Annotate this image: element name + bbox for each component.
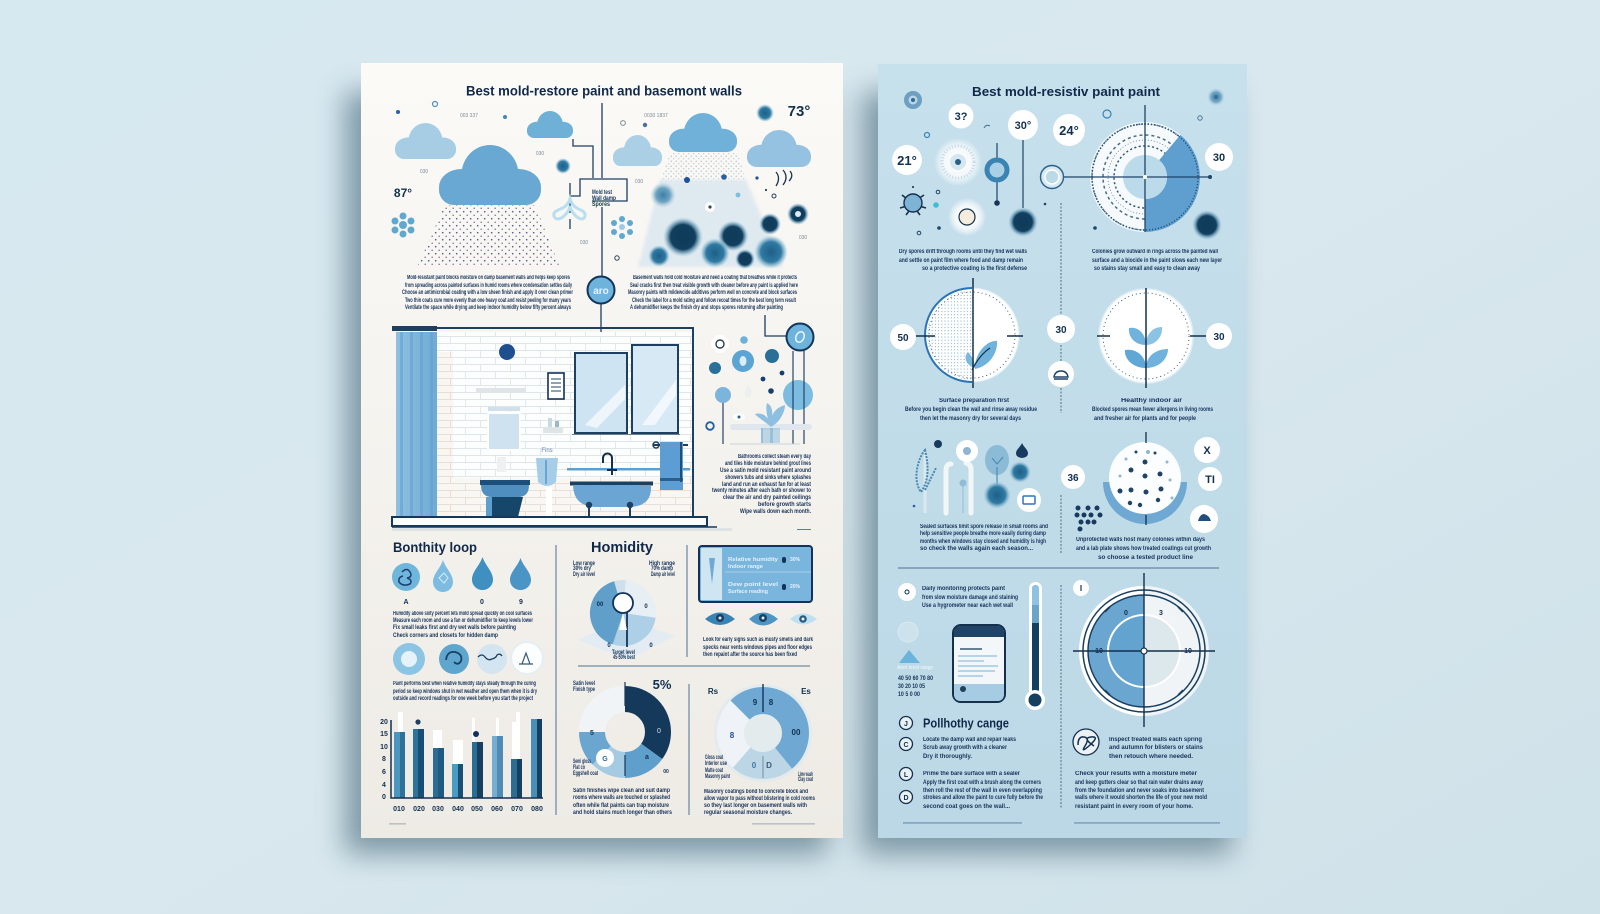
marker labels: J: [904, 721, 908, 728]
icon: badge top right of scene: [786, 324, 814, 350]
text block: drops: Humidity above sixty percent lets mold spread quickly on cool surfaces: [393, 611, 532, 617]
badge: centre icon: [1048, 361, 1074, 387]
clouds: [395, 111, 811, 205]
icon: central badge: [588, 276, 614, 304]
panel: humidity card: Indoor range: [728, 564, 763, 570]
text block: plants: so check the walls again each season...: [920, 546, 1033, 552]
text block: plants: [920, 524, 1048, 552]
text block: monitor: Daily monitoring protects paint: [922, 586, 1005, 592]
text block: badges: period so keep windows shut in wet weather and open them when it is dry: [393, 689, 537, 695]
text block: steps one: [923, 737, 1017, 760]
badge: screen icon: [1017, 488, 1041, 512]
stat: 73 percent: 73°: [788, 103, 810, 120]
footer: right: [903, 822, 1220, 824]
text block: drops: Measure each room and use a fan or dehumidifier to keep levels lower: [393, 618, 533, 624]
badges: top values: [892, 104, 1233, 175]
panel: humidity card: 30%: [790, 557, 801, 563]
fuzzy spore: [934, 138, 982, 186]
labels: drops: [403, 599, 523, 606]
small shelf: [543, 418, 563, 433]
badge: 30 centre: 30: [1055, 325, 1067, 336]
text block: right intro: Check the label for a mold rating and follow recoat times for the best long term result: [632, 298, 796, 304]
text block: top left: so a protective coating is the first defense: [922, 266, 1028, 272]
chart: donut left: Satin level: [573, 681, 595, 687]
text block: plants: Sealed surfaces limit spore release in small rooms and: [920, 524, 1048, 530]
chart: humidity pie: 0: [649, 643, 653, 649]
text block: eyes: specks near vents windows pipes and floor edges: [703, 645, 812, 651]
text block: donut right: allow vapor to pass without blistering in cold rooms: [704, 796, 815, 802]
wall picture: [548, 373, 564, 399]
text block: scene caption: clear the air and dry painted ceilings: [723, 495, 812, 501]
badge: 50: 50: [897, 333, 909, 344]
text block: dial left: Before you begin clean the wall and rinse away residue: [905, 407, 1038, 413]
marker labels: C: [903, 742, 909, 749]
text block: steps one: Scrub away growth with a cleaner: [923, 745, 1008, 751]
towel: [653, 442, 688, 490]
panel shadows: [345, 92, 1232, 854]
icons and legend: alerts: 30 20 10 05: [898, 684, 926, 690]
icons and legend: alerts: [897, 622, 934, 698]
chart: humidity pie: Dry air level: [573, 572, 595, 578]
chart: donut right: Rs: [708, 687, 719, 696]
badges: top values: 30°: [1015, 120, 1031, 132]
chart: donut right: Gloss coat: [705, 755, 723, 761]
dark mold blob right: [1192, 210, 1222, 240]
panel: humidity card: 20%: [790, 584, 801, 590]
tiny labels: 030: [580, 240, 588, 246]
heading: right lower: Pollhothy cange: [923, 716, 1009, 730]
text block: dial right: and fresher air for plants and for people: [1094, 416, 1197, 422]
text block: drops: Fix small leaks first and dry wet walls before painting: [393, 625, 516, 631]
chart: donut left: [573, 677, 672, 779]
chart: target dial: [1062, 102, 1220, 252]
text block: left intro: from spreading across painted surfaces in humid rooms where condensation settles daily: [405, 283, 572, 289]
chart: donut left: Flat co: [573, 765, 585, 771]
tiny labels: 030: [635, 179, 643, 185]
chart: dial right with plant: [1097, 288, 1207, 388]
rain dot field: [418, 205, 559, 265]
heading: humidity: Homidity: [591, 539, 654, 556]
text block: right steps two: [1074, 771, 1207, 810]
chart: donut left: 00: [663, 769, 669, 775]
text block: left intro: [402, 275, 573, 311]
chart: donut right: 00: [792, 728, 801, 737]
text block: donut right: regular seasonal moisture changes.: [704, 810, 792, 816]
text block: donut left: often while flat paints can trap moisture: [573, 803, 670, 809]
tiny labels: 0030 1837: [644, 113, 668, 119]
marker labels: [903, 721, 909, 802]
ring spore: [987, 160, 1007, 180]
text block: dial left: then let the masonry dry for several days: [920, 416, 1022, 422]
text block: culture plate: Unprotected walls host many colonies within days: [1076, 537, 1206, 543]
chart: humidity pie: Low range: [573, 561, 595, 567]
pale reference bars: [398, 712, 520, 764]
chart: donut left: 5%: [653, 677, 672, 692]
chart: donut right: 0: [752, 761, 757, 770]
small dots: [917, 110, 1202, 235]
counter: [567, 468, 690, 470]
text block: dial right: Healthy indoor air: [1121, 398, 1183, 404]
title: right poster: Best mold-resistiv paint paint: [972, 85, 1161, 99]
badge: 30 right: [1206, 323, 1232, 349]
axis labels: 15: [380, 731, 388, 738]
text block: top right: [1092, 249, 1223, 272]
chart: large gauge: 10: [1095, 648, 1103, 655]
text block: donut left: [573, 788, 673, 816]
cabinet and mirror: [476, 388, 525, 472]
bar chart: [380, 712, 543, 813]
text block: left intro: Ventilate the space while drying and keep indoor humidity below fifty percent always: [405, 305, 571, 311]
dots grid: [1074, 506, 1102, 532]
icons and legend: alerts: 40 50 60 70 80: [898, 676, 934, 682]
windows: [572, 345, 680, 434]
text block: donut right: Masonry coatings bond to concrete block and: [704, 789, 808, 795]
cluster: spores and plant: [706, 335, 813, 444]
text block: donut left: rooms where walls are touched or splashed: [573, 795, 670, 801]
text block: left intro: Choose an antimicrobial coating with a low sheen finish and apply it over clean primer: [402, 290, 573, 296]
chart: donut right: Matte coat: [705, 768, 723, 774]
connector lines top: [997, 140, 1023, 208]
title: left poster: Best mold-restore paint and basemont walls: [466, 84, 742, 98]
panel: humidity card: Relative humidity: [728, 557, 778, 563]
illustration: bathroom scene: [392, 326, 732, 531]
text block: top left: [899, 249, 1028, 272]
text block: right steps two: Check your results with a moisture meter: [1075, 771, 1198, 777]
badge: I: I: [1080, 584, 1082, 593]
chart: donut left: 0: [657, 728, 661, 735]
dark mold blob: [1008, 207, 1038, 237]
text block: steps two: Prime the bare surface with a sealer: [923, 771, 1021, 777]
dashed divider: [1060, 203, 1062, 553]
text block: dial left: Surface preparation first: [939, 398, 1009, 404]
axis labels: 4: [382, 782, 386, 789]
vase: [536, 448, 558, 517]
text block: steps two: second coat goes on the wall...: [923, 804, 1010, 810]
badges: culture plate: TI: [1205, 474, 1215, 486]
text block: culture plate: [1076, 537, 1211, 561]
text block: right steps two: walls where it would shorten the life of your new mold: [1074, 795, 1207, 801]
bars: [394, 719, 542, 798]
text block: right intro: A dehumidifier keeps the finish dry and stops spores returning after painting: [630, 305, 783, 311]
axis labels: 6: [382, 769, 386, 776]
text block: dial right: [1092, 398, 1214, 422]
text block: right steps one: then retouch where needed.: [1109, 754, 1193, 760]
text block: steps two: [923, 771, 1044, 810]
chart: donut right: 8: [730, 731, 735, 740]
text block: donut right: so they last longer on basement walls with: [704, 803, 807, 809]
labels: drops: A: [403, 599, 409, 606]
panel: humidity card: [699, 546, 812, 602]
numbered markers: [900, 716, 912, 804]
text block: top right: Colonies grow outward in rings across the painted wall: [1092, 249, 1218, 255]
text block: right intro: Basement walls hold cold moisture and need a coating that breathes while it protects: [633, 275, 797, 281]
text block: badges: [393, 681, 537, 702]
text block: drops: Check corners and closets for hidden damp: [393, 633, 498, 639]
floor slab: [392, 517, 732, 531]
panel: left poster: [361, 63, 843, 838]
axis labels: 0: [382, 794, 386, 801]
marker labels: L: [904, 772, 909, 779]
axis labels: 10: [380, 744, 388, 751]
chart: donut right: Interior use: [705, 761, 727, 767]
icon: central badge: aro: [593, 286, 609, 297]
text block: right steps one: and autumn for blisters or stains: [1109, 745, 1204, 751]
text block: dial right: Blocked spores mean fewer allergens in living rooms: [1092, 407, 1214, 413]
thermometer: [1025, 582, 1045, 710]
text block: right steps two: and keep gutters clear so that rain water drains away: [1075, 780, 1204, 786]
icons: circular badges: [393, 642, 543, 675]
badge: 36: 36: [1067, 473, 1079, 484]
badge: 50: [890, 324, 916, 350]
spore cloud field with mold blobs: [638, 153, 788, 269]
tiny labels: 030: [536, 151, 544, 157]
chart: donut left: 5: [590, 730, 594, 737]
frame: [393, 328, 693, 517]
text block: right steps two: resistant paint in every room of your home.: [1075, 804, 1193, 810]
chart: donut left: Finish type: [573, 687, 595, 693]
icons and legend: alerts: 10 5 0 00: [898, 692, 921, 698]
text block: right steps one: Inspect treated walls each spring: [1109, 737, 1202, 743]
mold and spore accents: [396, 102, 809, 260]
text block: right intro: Masonry paints with mildewcide additives perform well on concrete and block surfaces: [628, 290, 797, 296]
text block: scene caption: before growth starts: [758, 502, 812, 508]
chart: humidity pie: 30% dry: [573, 566, 592, 572]
toilet: [480, 480, 530, 517]
axes: [391, 720, 543, 798]
axis labels: 020: [413, 806, 425, 813]
text block: scene caption: and tiles hide moisture behind grout lines: [725, 461, 811, 467]
badges: culture plate: [1190, 437, 1222, 533]
chart: donut left: a: [645, 754, 649, 761]
chart: large gauge: 10: [1184, 648, 1192, 655]
wall tiles: [437, 332, 692, 517]
chart: donut right: 9: [753, 698, 758, 707]
axis labels: 8: [382, 756, 386, 763]
chart: donut right: Clay coat: [798, 777, 813, 783]
chart: donut right: D: [766, 761, 772, 770]
text block: top right: so stains stay small and easy to clean away: [1094, 266, 1201, 272]
dashed divider lower: [1060, 585, 1062, 808]
text block: scene caption: showers tubs and sinks where splashes: [725, 475, 811, 481]
text block: steps two: Apply the first coat with a brush along the corners: [923, 780, 1042, 786]
marker labels: D: [903, 795, 909, 802]
footer: left: [389, 822, 815, 825]
glowing spore: [948, 198, 986, 236]
axis labels: 060: [491, 806, 503, 813]
text block: badges: outside and record readings for one week before you start the project: [393, 696, 533, 702]
axis labels: 20: [380, 719, 388, 726]
text block: top left: and settle on paint film where food and damp remain: [899, 258, 1023, 264]
stat: 87 percent: 87°: [394, 186, 412, 200]
vent: [499, 344, 515, 360]
badge: 30 centre: [1047, 315, 1075, 343]
text block: scene caption: twenty minutes after each bath or shower to: [712, 488, 811, 494]
text block: right steps two: from the foundation and never soaks into basement: [1075, 788, 1204, 794]
connector label: Spores: [592, 202, 611, 208]
chart: humidity pie: 70% damp: [651, 566, 673, 572]
chart: donut right: 8: [769, 698, 774, 707]
chart: dial left with leaf: [915, 278, 1023, 388]
text block: steps one: Locate the damp wall and repair leaks: [923, 737, 1017, 743]
text block: left intro: Mold-resistant paint blocks moisture on damp basement walls and helps keep spores: [407, 275, 570, 281]
chart: donut right: Masonry paint: [705, 774, 730, 780]
vase: Fins: [541, 448, 553, 454]
text block: monitor: [922, 586, 1018, 609]
chart: donut right: [705, 684, 813, 783]
illustration: plants and spores: [913, 440, 1031, 513]
tiny labels: 030: [799, 235, 807, 241]
knob: [1040, 166, 1064, 188]
chart: humidity pie: [573, 561, 676, 661]
badges: top values: 3?: [955, 111, 968, 123]
text block: scene caption: [712, 454, 812, 515]
text block: plants: months when windows stay closed and humidity is high: [920, 539, 1046, 545]
text block: culture plate: so choose a tested product line: [1098, 555, 1194, 561]
tiny labels: 030: [420, 169, 428, 175]
chart: humidity pie: Damp air level: [651, 572, 675, 578]
text block: left intro: Two thin coats cure more evenly than one heavy coat and resist peeling for many years: [405, 298, 571, 304]
axis labels: 040: [452, 806, 464, 813]
text block: plants: help sensitive people breathe more easily during damp: [920, 531, 1046, 537]
text block: scene caption: Wipe walls down each month.: [740, 509, 811, 515]
text block: badges: Paint performs best when relative humidity stays steady through the curing: [393, 681, 536, 687]
icon: phone: [953, 625, 1005, 702]
axis labels: 080: [531, 806, 543, 813]
icon: ribbon: [554, 199, 585, 219]
text block: eyes: Look for early signs such as musty smells and dark: [703, 637, 813, 643]
panel: right poster: [878, 64, 1247, 838]
icon: snowflake spores: [392, 212, 633, 239]
chart: humidity pie: Target level: [612, 650, 635, 656]
axis labels: 030: [432, 806, 444, 813]
faucet: [603, 454, 617, 475]
text block: monitor: from slow moisture damage and staining: [922, 595, 1018, 601]
text block: eyes: then repaint after the source has been fixed: [703, 652, 797, 658]
text block: right intro: Seal cracks first then treat visible growth with cleaner before any paint is applied here: [630, 283, 798, 289]
chart: humidity pie: 45-50% best: [613, 655, 635, 661]
axis labels: 010: [393, 806, 405, 813]
tiny labels: 003 337: [460, 113, 478, 119]
labels: drops: 9: [519, 599, 523, 606]
text block: scene caption: Bathrooms collect steam every day: [738, 454, 811, 460]
chart: donut left: G: [602, 756, 608, 763]
labels: drops: 0: [480, 599, 484, 606]
chart: humidity pie: 00: [597, 602, 604, 608]
text block: donut left: and hold stains much longer than others: [573, 810, 673, 816]
icons and legend: alerts: Alert level range: [897, 665, 933, 671]
text block: dial left: [905, 398, 1038, 422]
chart: humidity pie: 0: [644, 604, 648, 610]
text block: scene caption: Use a satin mold resistant paint around: [720, 468, 811, 474]
chart: large gauge: [1073, 573, 1215, 727]
shower curtain: [392, 326, 437, 517]
badges: top values: 30: [1213, 152, 1225, 164]
chart: donut left: .: [630, 682, 632, 688]
spore icons top: [904, 88, 1225, 109]
badges: culture plate: X: [1203, 445, 1211, 457]
panel: left poster: Lime wash: [798, 772, 813, 778]
chart: donut right: Es: [801, 687, 811, 696]
bug-like spore: [900, 186, 939, 215]
chart: humidity pie: 0: [607, 643, 611, 649]
chart: large gauge: 3: [1159, 610, 1163, 617]
badge: 36: [1061, 465, 1085, 489]
chart: donut left: Eggshell coat: [573, 771, 598, 777]
text block: scene caption: land and run an exhaust fan for at least: [722, 482, 811, 488]
icons: eyes: [705, 612, 817, 626]
connector label: Wall damp: [592, 196, 616, 202]
text block: culture plate: and a lab plate shows how treated coatings cut growth: [1076, 546, 1211, 552]
text block: donut left: Satin finishes wipe clean and suit damp: [573, 788, 670, 794]
text block: steps two: strokes and allow the paint to cure fully before the: [923, 795, 1044, 801]
text block: top right: surface and a biocide in the paint slows each new layer: [1092, 258, 1223, 264]
panel: humidity card: Surface reading: [728, 589, 768, 595]
panel: humidity card: Dew point level: [728, 582, 779, 588]
chart: donut left: Semi gloss: [573, 759, 591, 765]
badges: top values: 21°: [897, 153, 917, 168]
text block: right intro: [628, 275, 798, 311]
text block: drops: [393, 611, 533, 639]
icon: emblem: [1073, 729, 1099, 755]
text block: donut right: [704, 789, 815, 816]
text block: monitor: Use a hygrometer near each wet wall: [922, 603, 1013, 609]
icons: water drops: [392, 557, 531, 592]
badge: small: [898, 583, 916, 601]
text block: eyes: [703, 637, 813, 658]
axis labels: [380, 719, 543, 813]
chart: culture plate: [1103, 432, 1187, 525]
chart: humidity pie: High range: [649, 561, 676, 567]
text block: steps two: then roll the rest of the wall in even overlapping: [923, 788, 1042, 794]
text block: right steps one: [1109, 737, 1204, 760]
tiny labels: [420, 113, 807, 246]
connector label: Mold test: [592, 190, 612, 196]
central connector lines: [570, 103, 787, 336]
badge: I: [1073, 580, 1089, 596]
text block: steps one: Dry it thoroughly.: [923, 754, 972, 760]
heading: left lower: Bonthity loop: [393, 539, 477, 555]
axis labels: 050: [471, 806, 483, 813]
bathtub: [570, 482, 653, 517]
connector label: [592, 190, 616, 208]
text block: top left: Dry spores drift through rooms until they find wet walls: [899, 249, 1028, 255]
badges: top values: 24°: [1059, 123, 1079, 138]
badge: 30 right: 30: [1213, 332, 1225, 343]
axis labels: 070: [511, 806, 523, 813]
chart: large gauge: 0: [1124, 610, 1128, 617]
